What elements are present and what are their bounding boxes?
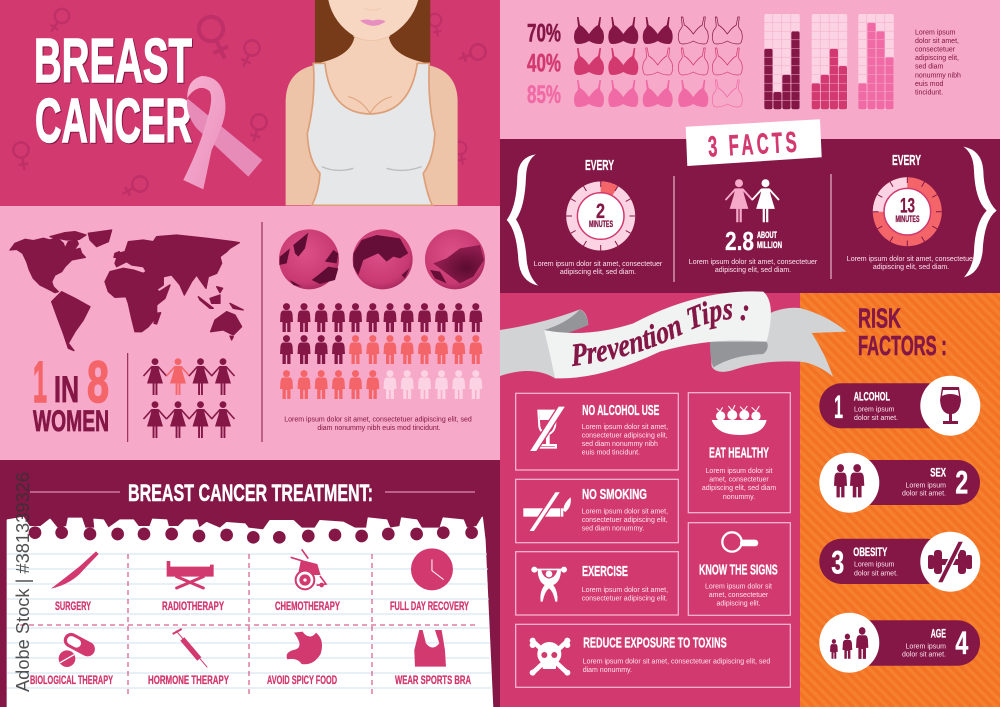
risk 4: age xyxy=(819,613,980,673)
icons: three globes xyxy=(279,229,485,289)
treatment labels xyxy=(30,601,471,687)
icon: capsule and pill xyxy=(59,630,97,667)
heading: risk factors: RISK xyxy=(858,302,901,333)
tip: no smoking xyxy=(582,486,668,533)
panel: world statistics xyxy=(0,206,500,460)
tip: reduce exposure to toxins: diam nonummy. xyxy=(583,667,632,674)
fact: every 2 minutes: adipiscing elit, sed diam. xyxy=(560,269,636,276)
stat: 1 in 8 women: WOMEN xyxy=(33,405,109,438)
text block: Lorem ipsum dolor sit amet, consectetuer adipiscing elit, sed xyxy=(284,416,472,424)
risk 1: alcohol: ALCOHOL xyxy=(854,390,890,404)
icon: scalpel xyxy=(51,551,99,589)
percent labels: 40% xyxy=(527,50,561,78)
text block: consectetuer xyxy=(915,47,956,54)
risk 3: obesity: OBESITY xyxy=(853,545,887,559)
background female symbols xyxy=(12,6,488,201)
treatment labels: HORMONE THERAPY xyxy=(148,675,229,687)
risk 3: obesity: Lorem ipsum xyxy=(854,562,895,569)
text block: sed diam xyxy=(915,64,944,71)
icon: dumbbell with slash xyxy=(928,541,972,583)
icon: magnifier xyxy=(722,532,755,552)
chart 1 xyxy=(764,31,800,109)
icon: no alcohol xyxy=(529,406,566,452)
panel: title banner xyxy=(0,0,500,206)
fact: 2.8 million: MILLION xyxy=(757,240,782,251)
fact: every 2 minutes: MINUTES xyxy=(589,219,613,229)
heading: 3 facts: 3 FACTS xyxy=(707,126,801,164)
panel: statistics with bras and grids xyxy=(500,0,1000,140)
fact: 2.8 million: Lorem ipsum dolor sit amet, consectetuer xyxy=(689,259,818,266)
pictogram: 36 figures xyxy=(280,303,482,399)
chart 3 xyxy=(858,23,894,109)
fact: 2.8 million xyxy=(689,179,818,274)
tip: no alcohol use: sed diam nonummy nibh xyxy=(582,441,658,448)
risk 4: age: AGE xyxy=(931,626,946,640)
fact: every 13 minutes: adipiscing elit, sed diam. xyxy=(873,264,949,271)
risk 2: sex xyxy=(819,453,980,513)
row 1 xyxy=(280,303,482,332)
icon: right brace xyxy=(963,147,997,277)
text block: adipiscing elit, xyxy=(915,55,959,62)
tip: exercise: consectetuer adipiscing elit. xyxy=(582,596,668,603)
percent labels: 85% xyxy=(527,81,561,109)
risk 2: sex: SEX xyxy=(930,466,946,480)
percent labels xyxy=(527,20,561,109)
tip: reduce exposure to toxins: REDUCE EXPOSURE TO TOXINS xyxy=(583,635,727,652)
chart 2 xyxy=(812,49,847,109)
treatment labels: CHEMOTHERAPY xyxy=(275,601,340,613)
tip: no alcohol use: consectetuer adipiscing elit, xyxy=(582,433,668,440)
fact: 2.8 million: adipiscing elit, sed diam. xyxy=(715,267,791,274)
fact: every 13 minutes: 13 xyxy=(900,195,915,218)
risk 1: alcohol: 1 xyxy=(834,389,843,425)
icon: fruit bowl xyxy=(712,405,767,435)
fact: every 2 minutes xyxy=(534,157,663,276)
tip: no smoking: consectetuer adipiscing elit, xyxy=(582,517,668,524)
fact: 2.8 million: 2.8 xyxy=(725,226,754,256)
tip: eat healthy: Lorem ipsum dolor sit xyxy=(706,468,773,475)
text block: nonummy nibh xyxy=(915,72,961,79)
risk 4: age: 4 xyxy=(955,625,968,661)
risk 1: alcohol xyxy=(819,376,980,436)
panel: 3 facts xyxy=(500,119,1000,293)
fact: every 13 minutes: EVERY xyxy=(892,152,921,169)
risk 4: age: Lorem ipsum xyxy=(906,643,946,650)
tip: know the signs xyxy=(699,561,778,608)
treatment labels: FULL DAY RECOVERY xyxy=(390,601,469,613)
fact: every 2 minutes: Lorem ipsum dolor sit amet, consectetuer xyxy=(534,261,663,268)
icon: left brace xyxy=(507,154,538,286)
heading: treatment: BREAST CANCER TREATMENT: xyxy=(128,480,373,507)
treatment labels: BIOLOGICAL THERAPY xyxy=(30,675,113,687)
risk 1: alcohol: dolor sit amet. xyxy=(854,415,898,422)
tip: no smoking: NO SMOKING xyxy=(582,486,647,503)
tip: no smoking: sed diam nonummy. xyxy=(582,526,644,533)
icon: couple xyxy=(834,464,864,497)
tip: exercise xyxy=(582,563,668,603)
text block: diam nonummy nibh euis mod tincidunt. xyxy=(317,425,441,432)
divider xyxy=(128,222,262,442)
text block: euis mod xyxy=(915,81,944,88)
heading: risk factors xyxy=(858,302,947,361)
tip: eat healthy: adipiscing elit, sed diam xyxy=(702,485,776,492)
fact: 2.8 million: ABOUT xyxy=(757,230,777,241)
tip: eat healthy: nonummy. xyxy=(723,494,755,501)
fact: every 2 minutes: 2 xyxy=(596,200,605,223)
risk 1: alcohol: Lorem ipsum xyxy=(854,407,895,414)
stat: 1 in 8 women: IN xyxy=(54,369,79,410)
icon: wine glass xyxy=(940,387,961,424)
fact: every 13 minutes xyxy=(847,152,976,271)
icon: bed xyxy=(167,561,214,577)
icon: wheelchair xyxy=(291,549,326,589)
text block: Lorem ipsum xyxy=(915,29,956,36)
tip: eat healthy: EAT HEALTHY xyxy=(709,444,769,461)
icon: stomach xyxy=(287,632,322,664)
text block: dolor sit amet, xyxy=(915,38,959,45)
risk 4: age: dolor sit amet. xyxy=(902,652,946,659)
treatment labels: RADIOTHERAPY xyxy=(162,601,224,613)
tip: no alcohol use: Lorem ipsum dolor sit amet, xyxy=(582,424,668,431)
tip: eat healthy: amet, consectetuer xyxy=(709,477,769,484)
tip: know the signs: Lorem ipsum dolor sit xyxy=(705,584,772,591)
percent labels: 70% xyxy=(527,20,561,48)
icon: weightlifter xyxy=(531,567,567,602)
row 2 xyxy=(280,335,482,364)
fact: every 2 minutes: EVERY xyxy=(585,157,614,174)
tip: no smoking: Lorem ipsum dolor sit amet, xyxy=(582,509,668,516)
tile gaps xyxy=(764,14,894,109)
treatment labels: WEAR SPORTS BRA xyxy=(395,675,471,687)
tip: eat healthy xyxy=(702,444,776,501)
risk 2: sex: dolor sit amet. xyxy=(902,491,946,498)
tip: reduce exposure to toxins xyxy=(583,635,770,674)
tip: reduce exposure to toxins: Lorem ipsum dolor sit amet, consectetuer adipiscing elit, sed xyxy=(583,658,770,665)
icon group: women holding hands xyxy=(144,358,234,438)
risk 3: obesity: 3 xyxy=(831,544,844,580)
risk 3: obesity: dolor sit amet. xyxy=(854,570,898,577)
stock id strip: Adobe Stock | #381339326 xyxy=(12,472,33,692)
prevention boxes xyxy=(516,393,790,687)
tip: exercise: Lorem ipsum dolor sit amet, xyxy=(582,587,668,594)
risk 2: sex: 2 xyxy=(955,464,968,500)
chart: tile columns xyxy=(764,14,894,109)
illustration: woman in white top xyxy=(286,0,458,205)
heading: 3 facts xyxy=(686,119,822,166)
tip: know the signs: adipiscing elit. xyxy=(717,600,761,608)
banner: prevention tips ribbon: Prevention Tips : xyxy=(572,301,748,366)
treatment labels: AVOID SPICY FOOD xyxy=(267,675,337,687)
icon: no smoking xyxy=(523,492,571,532)
icon: three people xyxy=(830,627,868,659)
panel: breast cancer treatment xyxy=(0,460,500,707)
pictogram: bras xyxy=(574,17,742,107)
torn notebook paper xyxy=(7,517,493,707)
tip: know the signs: KNOW THE SIGNS xyxy=(699,561,778,578)
text block: tincidunt. xyxy=(915,89,943,96)
tip: no alcohol use: euis mod tincidunt. xyxy=(582,450,640,456)
tip: know the signs: amet, consectetuer xyxy=(709,592,769,599)
panel: risk factors xyxy=(800,293,1000,707)
panel: prevention tips xyxy=(500,291,846,707)
icon: skull and crossbones xyxy=(530,638,570,676)
dividers xyxy=(674,174,831,282)
treatment labels: SURGERY xyxy=(55,601,91,613)
icon: syringe xyxy=(173,629,207,667)
icon: sports bra xyxy=(414,630,446,667)
stat: 1 in 8 women: 8 xyxy=(87,350,109,415)
column backgrounds xyxy=(764,14,894,109)
stat: 1 in 8 women xyxy=(33,350,109,438)
map: world map xyxy=(10,230,243,351)
treatment icons xyxy=(51,548,453,667)
stat: 1 in 8 women: 1 xyxy=(33,350,47,415)
tip: no alcohol use: NO ALCOHOL USE xyxy=(582,402,659,419)
banner: prevention tips ribbon xyxy=(500,291,846,378)
tip: exercise: EXERCISE xyxy=(582,563,628,580)
prevention icons xyxy=(523,405,767,676)
heading: breast cancer xyxy=(34,27,192,156)
heading: breast cancer: BREAST xyxy=(34,27,192,96)
risk 2: sex: Lorem ipsum xyxy=(906,482,946,489)
fact: every 13 minutes: Lorem ipsum dolor sit amet, consectetuer xyxy=(847,256,976,263)
icon: bed legs xyxy=(177,577,203,588)
risk 3: obesity xyxy=(819,532,980,592)
icon: clock xyxy=(411,548,453,590)
row 3 xyxy=(280,370,482,399)
heading: breast cancer: CANCER xyxy=(35,87,192,156)
icon: pink ribbon xyxy=(183,76,262,189)
fact: every 13 minutes: MINUTES xyxy=(896,214,920,224)
tip: no alcohol use xyxy=(582,402,668,456)
